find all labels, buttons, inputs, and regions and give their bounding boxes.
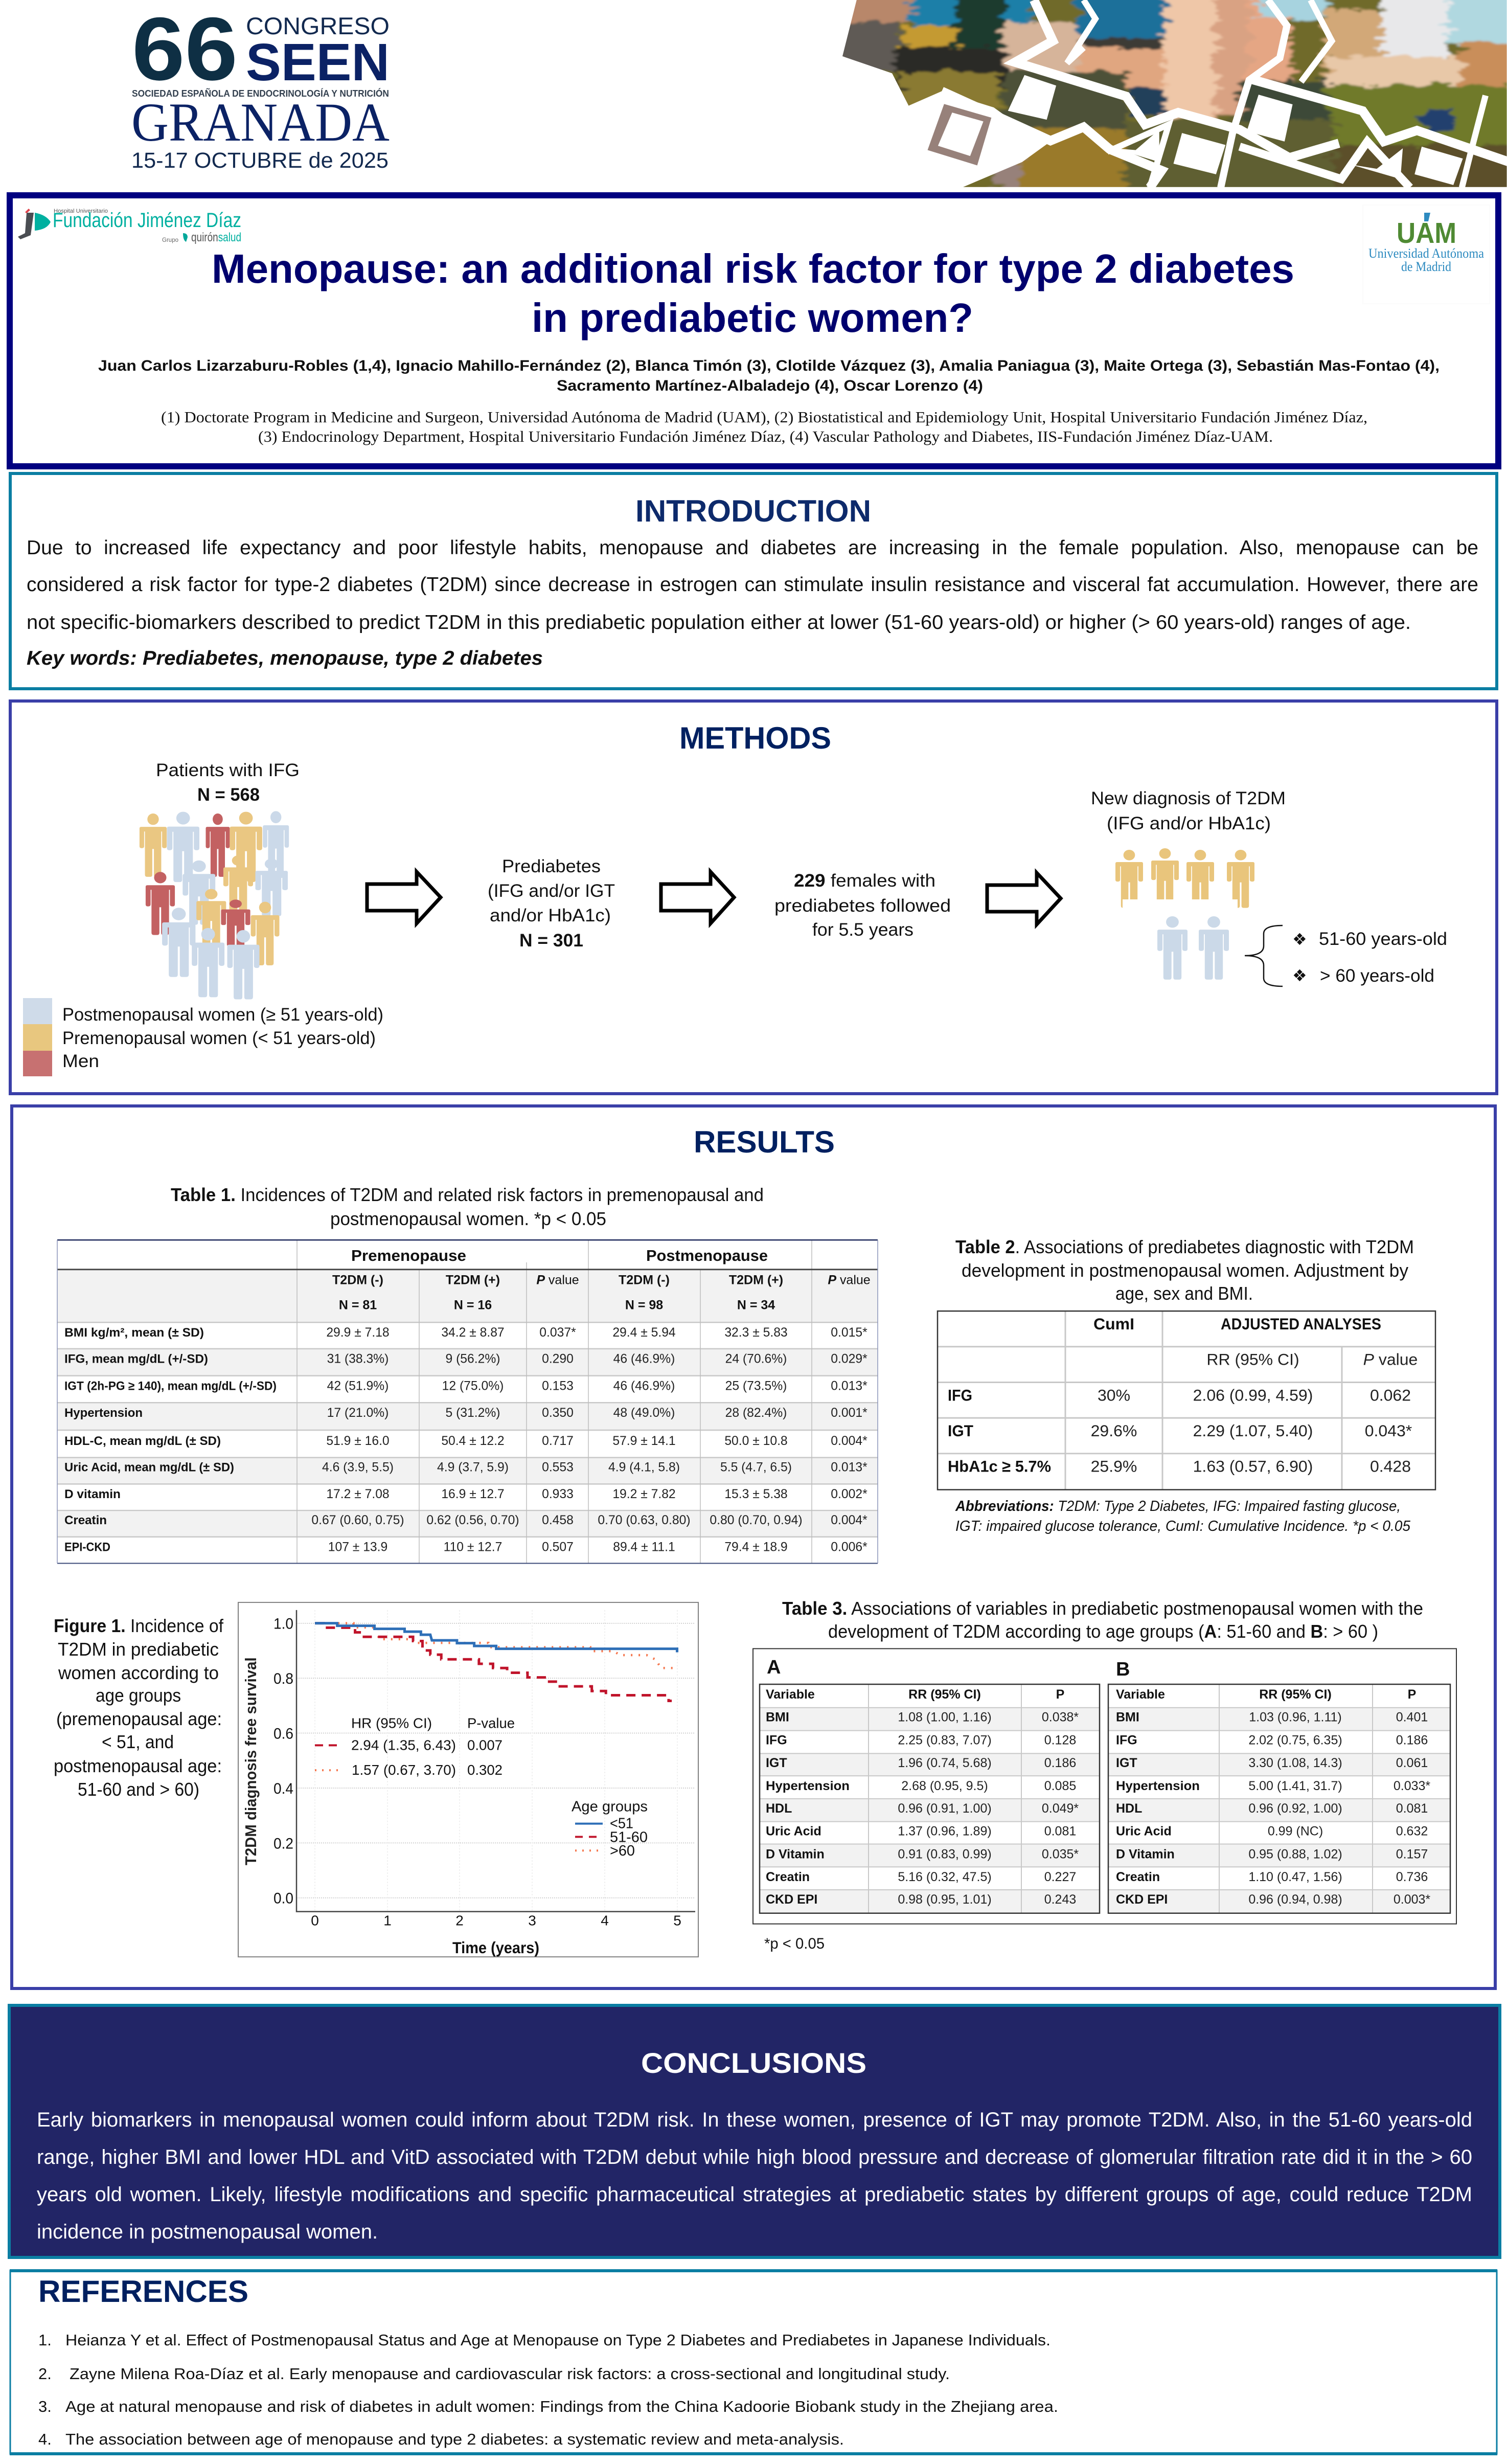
text: introduction body: Due to increased life expectancy and poor lifestyle habits, menopause and diabetes are increasing in the female population. Also, menopause can be <box>27 537 1478 559</box>
table 1: incidences and risk factors: 89.4 ± 11.1 <box>613 1541 675 1554</box>
logo: 66 Congreso SEEN Granada: 66 <box>132 0 238 99</box>
table 3B: over 60 years: 0.186 <box>1396 1733 1428 1747</box>
table 3A: 51-60 years: 0.98 (0.95, 1.01) <box>898 1892 992 1907</box>
banner: Alhambra mosaic illustration <box>842 0 1507 187</box>
text: figure 1 caption: Figure 1. Incidence of <box>54 1615 224 1636</box>
chart axis: x ticks: 3 <box>528 1913 536 1928</box>
table 3B: over 60 years: 0.401 <box>1396 1710 1428 1725</box>
table 1: incidences and risk factors: 15.3 ± 5.38 <box>724 1487 788 1501</box>
text: reference list: The association between age of menopause and type 2 diabetes: a systematic review and meta-analysis. <box>65 2430 844 2448</box>
table 3A: 51-60 years: 0.91 (0.83, 0.99) <box>898 1847 992 1861</box>
table 1: incidences and risk factors: 0.004* <box>831 1513 867 1527</box>
table 3A: 51-60 years: 0.085 <box>1044 1779 1076 1793</box>
text: age subgroups: > 60 years-old <box>1320 966 1434 986</box>
text: key words: Key words: Prediabetes, menopause, type 2 diabetes <box>27 647 543 669</box>
text: authors: Juan Carlos Lizarzaburu-Robles (1,4), Ignacio Mahillo-Fernández (2), Blanca Timón (3), Clotilde Vázquez (3), Amalia Paniagua (3), Maite Ortega (3), Sebastián Mas-Fontao (4), <box>98 357 1440 374</box>
table 3B: over 60 years: Uric Acid <box>1116 1824 1172 1839</box>
text: figure 1 caption: < 51, and <box>102 1731 174 1752</box>
logo: 66 Congreso SEEN Granada: GRANADA <box>131 93 390 153</box>
table 3B: over 60 years: Hypertension <box>1116 1779 1200 1793</box>
table 1: incidences and risk factors: P value <box>828 1273 871 1287</box>
text: introduction body: considered a risk factor for type-2 diabetes (T2DM) since decrease in estrogen can stimulate insulin resistance and visceral fat accumulation. However, there are <box>27 574 1478 596</box>
text: new diagnosis of T2DM <box>1091 788 1286 833</box>
arrow: follow-up to new diagnosis <box>987 873 1061 924</box>
table 3B: over 60 years: 0.632 <box>1396 1824 1428 1839</box>
table 1: incidences and risk factors: 32.3 ± 5.83 <box>724 1326 788 1340</box>
table 1: incidences and risk factors: N = 81 <box>339 1298 377 1312</box>
text: table 2 caption: Table 2. Associations of prediabetes diagnostic with T2DM <box>955 1236 1414 1257</box>
panel: conclusions <box>9 2005 1500 2257</box>
table 1: incidences and risk factors: 0.67 (0.60, 0.75) <box>311 1513 404 1527</box>
legend: patient groups <box>23 998 383 1076</box>
table 2: prediabetes associations: CumI <box>1093 1315 1134 1333</box>
text: table 1 caption <box>171 1184 764 1229</box>
logo: 66 Congreso SEEN Granada: SOCIEDAD ESPAÑOLA DE ENDOCRINOLOGÍA Y NUTRICIÓN <box>132 88 389 99</box>
text: prediabetes: (IFG and/or IGT <box>488 881 615 901</box>
chart axis: y ticks: 0.0 <box>273 1890 293 1907</box>
logo: 66 Congreso SEEN Granada: CONGRESO <box>246 12 390 39</box>
table 3A: 51-60 years: BMI <box>766 1710 789 1725</box>
logo: Fundación Jiménez Díaz: quirónsalud <box>191 231 241 244</box>
table 3A: 51-60 years: 1.08 (1.00, 1.16) <box>898 1710 992 1725</box>
table 3B: over 60 years: BMI <box>1116 1710 1139 1725</box>
table 1: incidences and risk factors: 25 (73.5%) <box>725 1380 787 1393</box>
table 1: incidences and risk factors: Uric Acid, mean mg/dL (± SD) <box>64 1461 234 1474</box>
table 1: incidences and risk factors: 0.350 <box>542 1406 574 1420</box>
logo: 66 Congreso SEEN Granada: SEEN <box>246 33 390 92</box>
text: affiliations: (1) Doctorate Program in Medicine and Surgeon, Universidad Autónoma de Madrid (UAM), (2) Biostatistical and Epidemiology Unit, Hospital Universitario Fundación Jiménez Díaz, <box>161 408 1367 426</box>
table 2: prediabetes associations: 29.6% <box>1091 1421 1137 1440</box>
axis title: x: Time (years) <box>452 1938 539 1957</box>
table 1: incidences and risk factors: 17 (21.0%) <box>327 1406 389 1420</box>
table 2: prediabetes associations: 0.043* <box>1365 1421 1412 1440</box>
table 1: incidences and risk factors: HDL-C, mean mg/dL (± SD) <box>64 1434 221 1448</box>
text: affiliations: (3) Endocrinology Department, Hospital Universitario Fundación Jiménez Díaz, (4) Vascular Pathology and Diabetes, IIS-Fundación Jiménez Díaz-UAM. <box>258 427 1273 445</box>
table 1: incidences and risk factors: T2DM (-) <box>619 1273 670 1287</box>
table 1: incidences and risk factors: 0.002* <box>831 1487 867 1501</box>
icon: premenopausal patients with T2DM <box>1115 848 1254 916</box>
arrow: patients to prediabetes <box>367 872 441 923</box>
table 2: prediabetes associations: 2.06 (0.99, 4.59) <box>1193 1386 1313 1404</box>
text: table 3 caption <box>782 1598 1423 1642</box>
table 1: incidences and risk factors: 0.006* <box>831 1541 867 1554</box>
table 3A: 51-60 years: P <box>1056 1687 1064 1702</box>
table 3B: over 60 years: RR (95% CI) <box>1259 1687 1332 1702</box>
table 3A: 51-60 years: 0.081 <box>1044 1824 1076 1839</box>
table 3B: over 60 years: 5.00 (1.41, 31.7) <box>1248 1779 1342 1793</box>
table 2: prediabetes associations <box>938 1311 1435 1489</box>
chart annotation: hazard ratios: 0.007 <box>467 1737 503 1753</box>
heading: methods: METHODS <box>679 721 831 755</box>
table 3B: over 60 years: 0.157 <box>1396 1847 1428 1861</box>
text: table 2 caption <box>955 1236 1414 1304</box>
table 1: incidences and risk factors: T2DM (+) <box>446 1273 500 1287</box>
chart annotation: hazard ratios <box>315 1715 515 1778</box>
table 1: incidences and risk factors: 5.5 (4.7, 6.5) <box>720 1461 792 1474</box>
table 1: incidences and risk factors: 0.458 <box>542 1513 574 1527</box>
table 1: incidences and risk factors <box>57 1240 878 1563</box>
table 3A: 51-60 years: 0.96 (0.91, 1.00) <box>898 1801 992 1816</box>
table 3B: over 60 years: HDL <box>1116 1801 1142 1816</box>
chart annotation: hazard ratios: HR (95% CI) <box>351 1715 432 1731</box>
text: conclusions body: Early biomarkers in menopausal women could inform about T2DM risk. In these women, presence of IGT may promote T2DM. Also, in the 51-60 years-old <box>37 2109 1472 2131</box>
brace: age subgroups <box>1245 925 1283 986</box>
table 3A: 51-60 years <box>760 1657 1100 1913</box>
table 3A: 51-60 years: A <box>767 1657 781 1678</box>
table 1: incidences and risk factors: 0.029* <box>831 1352 867 1366</box>
text: figure 1 caption <box>54 1615 224 1800</box>
text: new diagnosis of T2DM: New diagnosis of T2DM <box>1091 788 1286 808</box>
text: figure 1 caption: postmenopausal age: <box>54 1755 222 1776</box>
table 1: incidences and risk factors: N = 16 <box>454 1298 492 1312</box>
table 2: prediabetes associations: HbA1c ≥ 5.7% <box>948 1457 1051 1476</box>
table 2: prediabetes associations: 0.062 <box>1370 1386 1411 1404</box>
table 1: incidences and risk factors: Postmenopause <box>646 1247 768 1264</box>
table 1: incidences and risk factors: 4.6 (3.9, 5.5) <box>322 1461 394 1474</box>
table 1: incidences and risk factors: 0.80 (0.70, 0.94) <box>710 1513 803 1527</box>
table 1: incidences and risk factors: 0.037* <box>539 1326 576 1340</box>
text: abbreviations <box>955 1498 1411 1534</box>
table 3B: over 60 years: 0.033* <box>1394 1779 1430 1793</box>
text: reference list: Heianza Y et al. Effect of Postmenopausal Status and Age at Menopause on Type 2 Diabetes and Prediabetes in Japanese Individuals. <box>65 2331 1051 2349</box>
chart annotation: hazard ratios: 0.302 <box>467 1762 503 1778</box>
chart lines: survival curves by age group <box>315 1623 677 1701</box>
table 1: incidences and risk factors: 0.013* <box>831 1380 867 1393</box>
table 3B: over 60 years: CKD EPI <box>1116 1892 1168 1907</box>
text: figure 1 caption: T2DM in prediabetic <box>58 1639 219 1660</box>
table 1: incidences and risk factors: T2DM (+) <box>729 1273 783 1287</box>
table 3B: over 60 years: B <box>1116 1659 1130 1680</box>
table 3B: over 60 years: D Vitamin <box>1116 1847 1175 1861</box>
text: introduction body <box>27 530 1478 642</box>
table 3B: over 60 years: 0.003* <box>1394 1892 1430 1907</box>
table 3B: over 60 years: 0.96 (0.92, 1.00) <box>1248 1801 1342 1816</box>
table 3B: over 60 years: P <box>1408 1687 1416 1702</box>
table 3A: 51-60 years: 0.227 <box>1044 1870 1076 1884</box>
table 1: incidences and risk factors: 42 (51.9%) <box>327 1380 389 1393</box>
table 1: incidences and risk factors: BMI kg/m², mean (± SD) <box>64 1326 204 1340</box>
text: patients with IFG <box>156 760 300 805</box>
table 3B: over 60 years: 3.30 (1.08, 14.3) <box>1248 1756 1342 1770</box>
text: table 3 footnote: *p < 0.05 <box>764 1935 825 1952</box>
chart axis: y ticks <box>273 1616 293 1907</box>
logo: Fundación Jiménez Díaz <box>18 208 241 244</box>
logo: 66 Congreso SEEN Granada <box>131 0 390 173</box>
table 1: incidences and risk factors: 57.9 ± 14.1 <box>612 1434 676 1448</box>
table 3A: 51-60 years: RR (95% CI) <box>908 1687 981 1702</box>
table 3A: 51-60 years: IGT <box>766 1756 787 1770</box>
table 1: incidences and risk factors: 0.001* <box>831 1406 867 1420</box>
table 1: incidences and risk factors: 50.0 ± 10.8 <box>724 1434 788 1448</box>
text: abbreviations: Abbreviations: T2DM: Type 2 Diabetes, IFG: Impaired fasting glucose, <box>955 1498 1401 1514</box>
chart axis: y ticks: 0.2 <box>273 1835 293 1852</box>
table 1: incidences and risk factors: P value <box>536 1273 579 1287</box>
table 1: incidences and risk factors: 28 (82.4%) <box>725 1406 787 1420</box>
heading: introduction: INTRODUCTION <box>635 494 871 528</box>
icon: postmenopausal patients with T2DM <box>1157 916 1229 980</box>
table 1: incidences and risk factors: Creatin <box>64 1513 107 1527</box>
table 1: incidences and risk factors: 12 (75.0%) <box>442 1380 504 1393</box>
chart annotation: hazard ratios: 1.57 (0.67, 3.70) <box>352 1762 456 1778</box>
chart annotation: hazard ratios: P-value <box>467 1715 515 1731</box>
chart axis: y ticks: 0.4 <box>273 1780 293 1797</box>
table 1: incidences and risk factors: 0.717 <box>542 1434 574 1448</box>
table 3A: 51-60 years: IFG <box>766 1733 787 1747</box>
chart axis: x ticks: 4 <box>601 1913 609 1928</box>
table 1: incidences and risk factors: 29.9 ± 7.18 <box>326 1326 390 1340</box>
table 1: incidences and risk factors: 0.004* <box>831 1434 867 1448</box>
logo: Fundación Jiménez Díaz: Hospital Universitario <box>54 208 108 214</box>
table 1: incidences and risk factors: 46 (46.9%) <box>613 1352 675 1366</box>
text: table 3 caption: Table 3. Associations of variables in prediabetic postmenopausal women with the <box>782 1598 1423 1619</box>
table 1: incidences and risk factors: 17.2 ± 7.08 <box>326 1487 390 1501</box>
text: table 1 caption: postmenopausal women. *p < 0.05 <box>330 1208 606 1229</box>
logo: Fundación Jiménez Díaz: Grupo <box>162 236 178 243</box>
arrow: prediabetes to follow-up <box>661 872 734 923</box>
text: authors: Sacramento Martínez-Albaladejo (4), Oscar Lorenzo (4) <box>557 377 983 394</box>
text: reference list: 4. <box>38 2430 52 2448</box>
table 3A: 51-60 years: CKD EPI <box>766 1892 817 1907</box>
table 1: incidences and risk factors: Premenopause <box>351 1247 466 1264</box>
table 1: incidences and risk factors: D vitamin <box>64 1487 121 1501</box>
table 3B: over 60 years: Variable <box>1116 1687 1165 1702</box>
table 1: incidences and risk factors: 16.9 ± 12.7 <box>441 1487 505 1501</box>
text: prediabetes: N = 301 <box>519 931 583 951</box>
text: age subgroups: 51-60 years-old <box>1319 929 1447 949</box>
table 1: incidences and risk factors: 0.70 (0.63, 0.80) <box>598 1513 691 1527</box>
text: reference list: Zayne Milena Roa-Díaz et al. Early menopause and cardiovascular risk factors: a cross-sectional and longitudinal study. <box>70 2365 950 2383</box>
table 1: incidences and risk factors: 0.507 <box>542 1541 574 1554</box>
table 2: prediabetes associations: 1.63 (0.57, 6.90) <box>1193 1457 1313 1476</box>
chart axis: y ticks: 1.0 <box>273 1616 293 1633</box>
table 3B: over 60 years: Creatin <box>1116 1870 1160 1884</box>
legend: patient groups: Premenopausal women (< 51 years-old) <box>62 1028 376 1048</box>
legend: age groups: 51-60 <box>610 1829 648 1845</box>
table 1: incidences and risk factors: 0.015* <box>831 1326 867 1340</box>
table 2: prediabetes associations: RR (95% CI) <box>1206 1350 1299 1369</box>
chart axis: y ticks: 0.8 <box>273 1670 293 1687</box>
text: age subgroups: ❖ <box>1292 966 1307 985</box>
table 3B: over 60 years: 2.02 (0.75, 6.35) <box>1248 1733 1342 1747</box>
table 3A: 51-60 years: Creatin <box>766 1870 810 1884</box>
table 3A: 51-60 years: Variable <box>766 1687 815 1702</box>
text: table 3 caption: development of T2DM according to age groups (A: 51-60 and B: > 60 ) <box>828 1621 1378 1642</box>
text: figure 1 caption: women according to <box>58 1662 219 1683</box>
table 3B: over 60 years <box>1108 1659 1450 1913</box>
table 1: incidences and risk factors: 0.290 <box>542 1352 574 1366</box>
legend: patient groups: Men <box>62 1051 99 1071</box>
table 3A: 51-60 years: 0.038* <box>1042 1710 1079 1725</box>
table 1: incidences and risk factors: 46 (46.9%) <box>613 1380 675 1393</box>
text: conclusions body: incidence in postmenopausal women. <box>37 2221 378 2243</box>
text: follow-up cohort <box>774 871 951 940</box>
text: follow-up cohort: 229 females with <box>794 871 935 891</box>
text: conclusions body: range, higher BMI and lower HDL and VitD associated with T2DM debut while high blood pressure and decrease of glomerular filtration rate did it in the > 60 <box>37 2146 1472 2168</box>
logo: Universidad Autónoma de Madrid <box>1363 205 1490 304</box>
text: authors <box>98 357 1440 394</box>
table 2: prediabetes associations: IGT <box>948 1421 973 1440</box>
table 1: incidences and risk factors: 34.2 ± 8.87 <box>441 1326 505 1340</box>
text: table 1 caption: Table 1. Incidences of T2DM and related risk factors in premenopausal and <box>171 1184 764 1205</box>
chart axis: y ticks: 0.6 <box>273 1726 293 1742</box>
table 1: incidences and risk factors: IGT (2h-PG ≥ 140), mean mg/dL (+/-SD) <box>64 1380 277 1393</box>
logo: 66 Congreso SEEN Granada: 15-17 OCTUBRE de 2025 <box>131 148 389 173</box>
text: figure 1 caption: age groups <box>96 1685 181 1706</box>
text: reference list <box>38 2331 1058 2448</box>
table 1: incidences and risk factors: 110 ± 12.7 <box>444 1541 502 1554</box>
table 1: incidences and risk factors: N = 98 <box>625 1298 663 1312</box>
table 3A: 51-60 years: 1.96 (0.74, 5.68) <box>898 1756 992 1770</box>
text: conclusions body <box>37 2101 1472 2255</box>
text: age subgroups: ❖ <box>1292 930 1307 949</box>
table 3A: 51-60 years: 0.186 <box>1044 1756 1076 1770</box>
table 3B: over 60 years: 0.99 (NC) <box>1268 1824 1323 1839</box>
table 2: prediabetes associations: 2.29 (1.07, 5.40) <box>1193 1421 1313 1440</box>
panel: introduction <box>10 473 1497 689</box>
text: patients with IFG: Patients with IFG <box>156 760 300 780</box>
chart axis: x ticks: 2 <box>455 1913 464 1928</box>
table 2: prediabetes associations: ADJUSTED ANALYSES <box>1221 1315 1381 1333</box>
text: abbreviations: IGT: impaired glucose tolerance, CumI: Cumulative Incidence. *p < 0.05 <box>955 1518 1411 1534</box>
table 3A: 51-60 years: 0.049* <box>1042 1801 1079 1816</box>
chart axis: x ticks: 1 <box>383 1913 392 1928</box>
chart annotation: hazard ratios: 2.94 (1.35, 6.43) <box>351 1737 456 1753</box>
table 3B: over 60 years: IFG <box>1116 1733 1137 1747</box>
text: follow-up cohort: prediabetes followed <box>774 896 951 916</box>
logo: Universidad Autónoma de Madrid: Universidad Autónoma <box>1368 246 1484 261</box>
chart axis: x ticks: 0 <box>311 1913 319 1928</box>
table 1: incidences and risk factors: 0.62 (0.56, 0.70) <box>426 1513 519 1527</box>
table 2: prediabetes associations: 30% <box>1098 1386 1130 1404</box>
panel: references <box>10 2271 1497 2454</box>
panel: introduction: not specific-biomarkers described to predict T2DM in this prediabetic population either at lower (51-60 years-old) or higher (> 60 years-old) ranges of age. <box>27 612 1411 634</box>
table 1: incidences and risk factors: 19.2 ± 7.82 <box>612 1487 676 1501</box>
table 3A: 51-60 years: D Vitamin <box>766 1847 825 1861</box>
table 3A: 51-60 years: 0.243 <box>1044 1892 1076 1907</box>
legend: age groups: >60 <box>610 1843 635 1859</box>
logo: Universidad Autónoma de Madrid: de Madrid <box>1401 259 1451 274</box>
table 3A: 51-60 years: 2.68 (0.95, 9.5) <box>901 1779 988 1793</box>
table 3B: over 60 years: 1.03 (0.96, 1.11) <box>1249 1710 1342 1725</box>
text: figure 1 caption: (premenopausal age: <box>56 1708 222 1729</box>
text: reference list: 2. <box>38 2365 52 2383</box>
table 3A: 51-60 years: 1.37 (0.96, 1.89) <box>898 1824 992 1839</box>
heading: results: RESULTS <box>694 1125 835 1159</box>
text: affiliations <box>161 408 1367 445</box>
table 1: incidences and risk factors: 48 (49.0%) <box>613 1406 675 1420</box>
table 3A: 51-60 years: 5.16 (0.32, 47.5) <box>898 1870 992 1884</box>
legend: age groups: Age groups <box>572 1799 648 1815</box>
table 2: prediabetes associations: 0.428 <box>1370 1457 1411 1476</box>
text: age subgroups <box>1292 929 1447 986</box>
table 1: incidences and risk factors: 29.4 ± 5.94 <box>612 1326 676 1340</box>
text: prediabetes: Prediabetes <box>502 856 601 876</box>
table 3B: over 60 years: 0.96 (0.94, 0.98) <box>1248 1892 1342 1907</box>
table 1: incidences and risk factors: 79.4 ± 18.9 <box>724 1541 788 1554</box>
table 1: incidences and risk factors: 50.4 ± 12.2 <box>441 1434 505 1448</box>
table 3B: over 60 years: 0.061 <box>1396 1756 1428 1770</box>
table 3B: over 60 years: 0.95 (0.88, 1.02) <box>1248 1847 1342 1861</box>
table 1: incidences and risk factors: 0.013* <box>831 1461 867 1474</box>
heading: poster title <box>212 246 1294 341</box>
chart axis: x ticks: 5 <box>673 1913 681 1928</box>
chart axis: x ticks <box>311 1913 681 1928</box>
table 1: incidences and risk factors: 24 (70.6%) <box>725 1352 787 1366</box>
logo: Universidad Autónoma de Madrid: UAM <box>1397 217 1456 250</box>
table 1: incidences and risk factors: EPI-CKD <box>64 1541 110 1554</box>
logo: Fundación Jiménez Díaz: Fundación Jiménez Díaz <box>53 209 241 232</box>
heading: references: REFERENCES <box>38 2274 248 2309</box>
legend: age groups: <51 <box>610 1816 633 1832</box>
panel: methods <box>10 701 1497 1094</box>
table 3A: 51-60 years: 2.25 (0.83, 7.07) <box>898 1733 992 1747</box>
table 1: incidences and risk factors: T2DM (-) <box>332 1273 383 1287</box>
text: table 2 caption: age, sex and BMI. <box>1115 1283 1253 1304</box>
heading: poster title: Menopause: an additional risk factor for type 2 diabetes <box>212 246 1294 291</box>
table 1: incidences and risk factors: Hypertension <box>64 1406 143 1420</box>
table 3A: 51-60 years: HDL <box>766 1801 792 1816</box>
legend: age groups <box>572 1799 648 1859</box>
text: new diagnosis of T2DM: (IFG and/or HbA1c) <box>1107 813 1271 833</box>
text: reference list: 1. <box>38 2331 52 2349</box>
table 3A: 51-60 years: 0.128 <box>1044 1733 1076 1747</box>
icon: patient crowd <box>140 811 289 999</box>
table 3A: 51-60 years: Uric Acid <box>766 1824 821 1839</box>
text: prediabetes: and/or HbA1c) <box>490 906 611 925</box>
table 3B: over 60 years: 0.736 <box>1396 1870 1428 1884</box>
table 1: incidences and risk factors: 5 (31.2%) <box>445 1406 500 1420</box>
table 1: incidences and risk factors: 4.9 (3.7, 5.9) <box>437 1461 509 1474</box>
table 3: associations by age group <box>753 1648 1456 1924</box>
text: conclusions body: years old women. Likely, lifestyle modifications and specific pharmaceutical strategies at prediabetic states by different groups of age, could reduce T2DM <box>37 2183 1472 2206</box>
table 1: incidences and risk factors: N = 34 <box>737 1298 775 1312</box>
table 3A: 51-60 years: Hypertension <box>766 1779 850 1793</box>
legend: patient groups: Postmenopausal women (≥ 51 years-old) <box>62 1005 383 1025</box>
text: table 2 caption: development in postmenopausal women. Adjustment by <box>962 1260 1408 1281</box>
table 3B: over 60 years: IGT <box>1116 1756 1137 1770</box>
table 1: incidences and risk factors: 31 (38.3%) <box>327 1352 389 1366</box>
table 2: prediabetes associations: 25.9% <box>1091 1457 1137 1476</box>
table 3B: over 60 years: 0.081 <box>1396 1801 1428 1816</box>
table 2: prediabetes associations: IFG <box>948 1386 972 1404</box>
table 1: incidences and risk factors: 4.9 (4.1, 5.8) <box>608 1461 680 1474</box>
panel: results <box>12 1106 1495 1988</box>
table 1: incidences and risk factors: 0.153 <box>542 1380 574 1393</box>
text: reference list: 3. <box>38 2398 52 2415</box>
table 1: incidences and risk factors: 0.553 <box>542 1461 574 1474</box>
text: prediabetes <box>488 856 615 951</box>
text: reference list: Age at natural menopause and risk of diabetes in adult women: Findings from the China Kadoorie Biobank study in the Zhejiang area. <box>65 2398 1058 2415</box>
heading: conclusions: CONCLUSIONS <box>641 2047 866 2079</box>
text: patients with IFG: N = 568 <box>197 785 260 805</box>
text: follow-up cohort: for 5.5 years <box>812 920 914 940</box>
chart: Kaplan-Meier T2DM free survival <box>238 1602 698 1957</box>
table 3B: over 60 years: 1.10 (0.47, 1.56) <box>1248 1870 1342 1884</box>
heading: poster title: in prediabetic women? <box>532 295 973 341</box>
table 3A: 51-60 years: 0.035* <box>1042 1847 1079 1861</box>
table 1: incidences and risk factors: 107 ± 13.9 <box>328 1541 387 1554</box>
table 1: incidences and risk factors: 9 (56.2%) <box>445 1352 500 1366</box>
axis title: y: T2DM diagnosis free survival <box>242 1657 260 1865</box>
table 1: incidences and risk factors: 51.9 ± 16.0 <box>326 1434 390 1448</box>
table 1: incidences and risk factors: IFG, mean mg/dL (+/-SD) <box>64 1352 208 1366</box>
panel: title <box>10 195 1498 466</box>
text: figure 1 caption: 51-60 and > 60) <box>78 1779 199 1800</box>
table 2: prediabetes associations: P value <box>1363 1350 1418 1369</box>
table 1: incidences and risk factors: 0.933 <box>542 1487 574 1501</box>
